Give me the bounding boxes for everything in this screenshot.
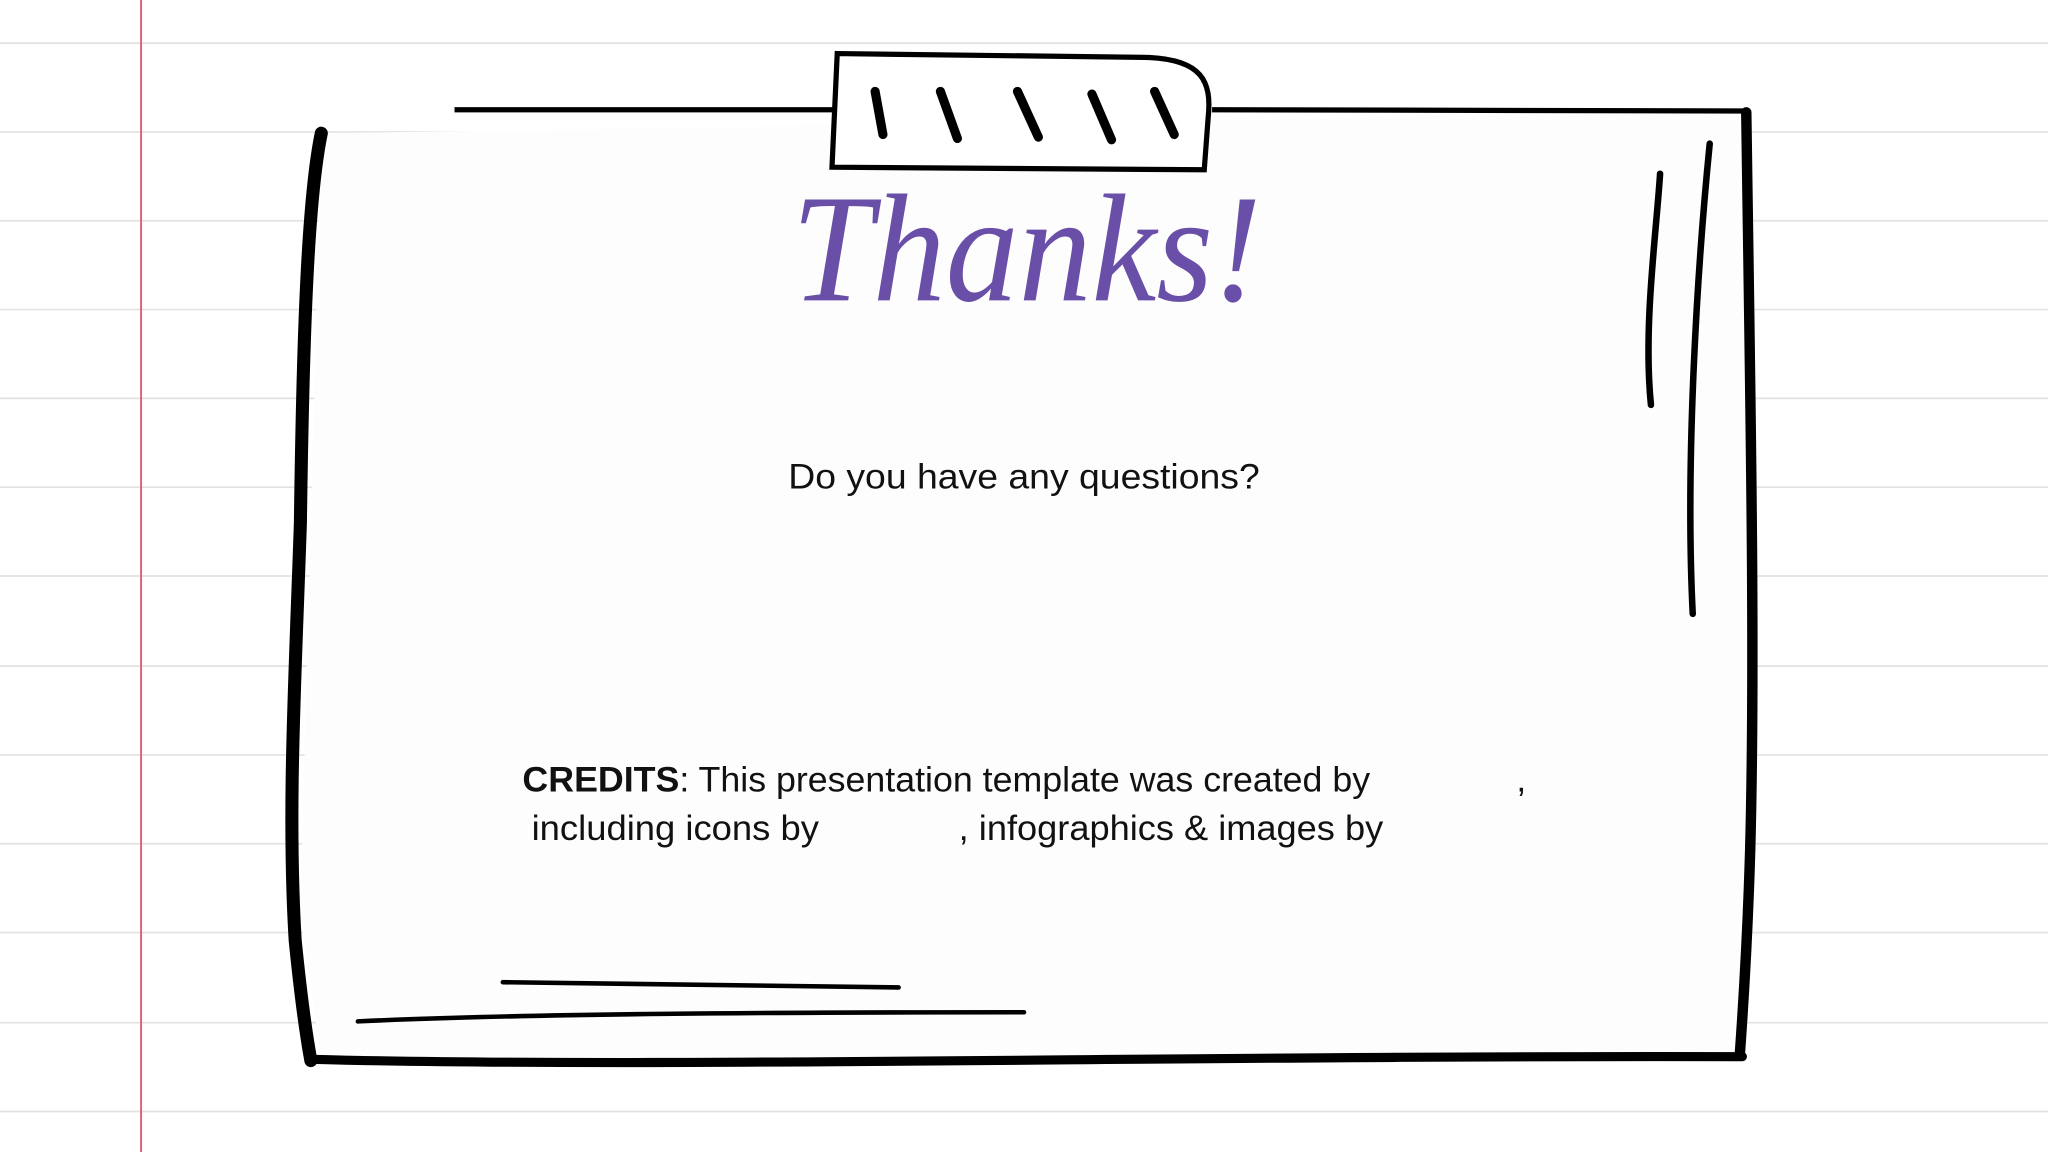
text: credits: CREDITS: This presentation template was created by bbox=[522, 761, 1370, 800]
icon: tape tab bbox=[832, 54, 1209, 170]
text: credits: including icons by bbox=[532, 809, 819, 848]
text: question: Do you have any questions? bbox=[788, 457, 1260, 496]
text: credits bbox=[522, 761, 1526, 848]
text: credits: , infographics & images by bbox=[959, 809, 1384, 848]
text: credits: , bbox=[1516, 761, 1526, 800]
panel: sketched frame bbox=[292, 110, 1752, 1063]
title: Thanks! bbox=[792, 164, 1262, 334]
